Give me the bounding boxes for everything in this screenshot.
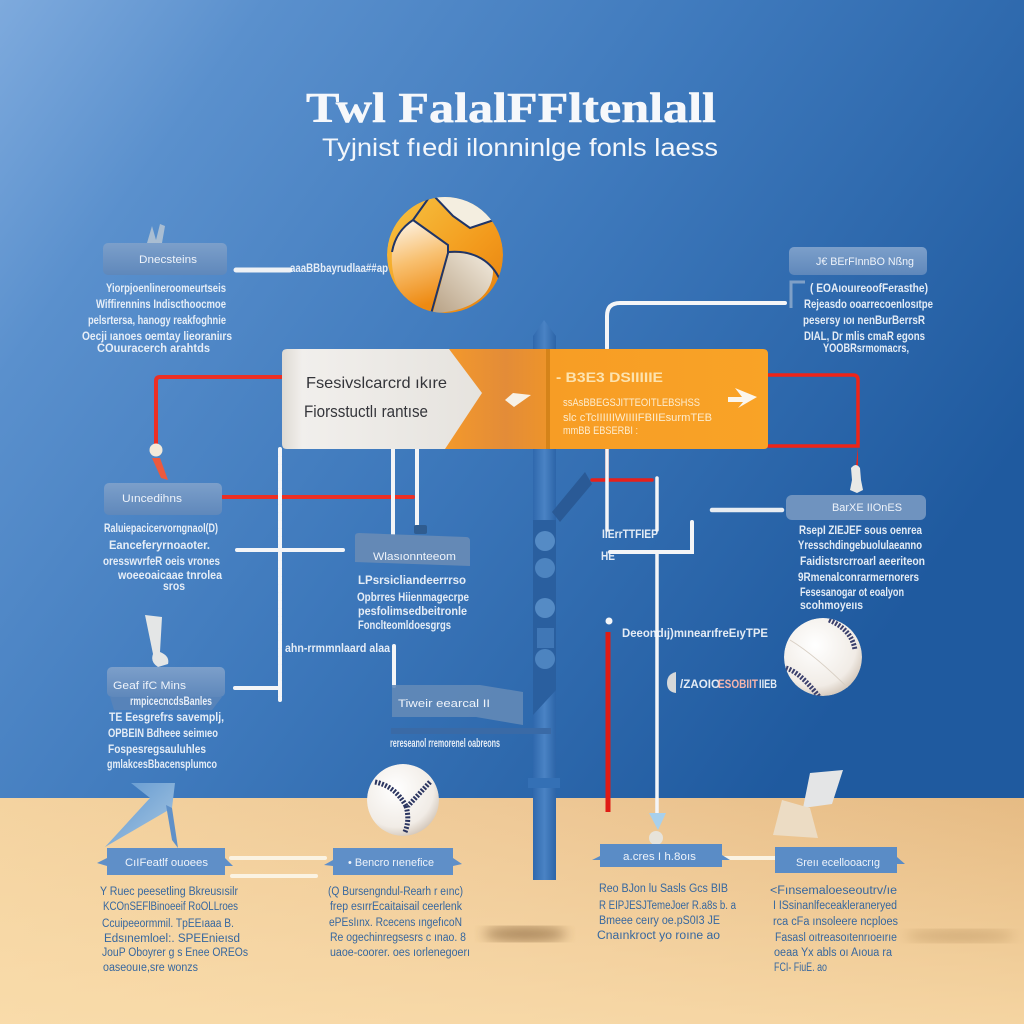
info block: mid right: Yresschdingebuolulaeanno bbox=[798, 540, 922, 552]
white bracket right bbox=[610, 522, 692, 552]
info block: bottom 1: KCOnSEFlBinoeeif RoOLLroes bbox=[103, 901, 238, 913]
info block: top right bbox=[789, 247, 933, 355]
connector lines bbox=[156, 270, 858, 876]
info block: bottom 1: Ccuipeeormmil. TpEEıaaa B. bbox=[102, 918, 234, 930]
label chip bbox=[104, 483, 222, 515]
info block: mid left: oresswvrfeR oeis vrones bbox=[103, 556, 220, 568]
bracket garble text: HE bbox=[601, 551, 615, 563]
orange panel body: ssAsBBEGSJITTEOITLEBSHSS bbox=[563, 397, 700, 409]
label ribbon bbox=[97, 848, 233, 875]
notes: right of center: IIEB bbox=[759, 679, 777, 691]
sand ground bbox=[0, 798, 1024, 1024]
info block: lower left: rmpicecncdsBanles bbox=[130, 696, 212, 708]
info block: bottom 3: a.cres I h.8oıs bbox=[623, 851, 697, 863]
red connector: middle row bbox=[222, 495, 413, 499]
info block: top left: Oecji ıanoes oemtay lieoraniırs bbox=[82, 331, 232, 343]
soccer ball right bbox=[784, 618, 862, 698]
info block: mid left bbox=[103, 444, 223, 593]
top right white connector bbox=[607, 303, 785, 348]
info block: bottom 1: CıIFeatlf ouoees bbox=[125, 857, 209, 869]
info block: top left bbox=[82, 224, 232, 355]
info block: bottom 4: FCI- FiuE. ao bbox=[774, 962, 827, 974]
info block: mid right bbox=[786, 447, 926, 612]
info block: center: Wlasıonnteeom bbox=[373, 551, 456, 563]
info block: bottom 1: JouP Oboyrer g s Enee OREOs bbox=[102, 947, 248, 959]
icon: tag bbox=[145, 615, 168, 667]
info block: top right: DIAL, Dr mlis cmaR egons bbox=[804, 331, 925, 343]
info block: bottom 2: Re ogechinregsesrs c ınao. 8 bbox=[330, 932, 466, 944]
info block: top left: Dnecsteins bbox=[139, 254, 198, 266]
info block: bottom 4: Fasasl oıtreasoıtenrıoeırıe bbox=[775, 932, 897, 944]
info block: bottom 4: rca cFa ınsoleere ncploes bbox=[773, 916, 898, 928]
bottom links bbox=[231, 858, 775, 876]
soccer ball orange bbox=[387, 195, 503, 314]
main panel: mmBB EBSERBI : bbox=[563, 425, 638, 437]
info block: bottom 1: oaseouıe,sre wonzs bbox=[103, 962, 198, 974]
info block: top right: J€ BErFInnBO Nßng bbox=[816, 256, 914, 268]
info block: center: Opbrres Hiienmagecrpe bbox=[357, 592, 469, 604]
info block: mid right: scohmoyeııs bbox=[800, 600, 863, 612]
central pole bbox=[528, 320, 592, 880]
info block: bottom 3: Bmeee ceıry oe.pS0I3 JE bbox=[599, 915, 720, 927]
info block: lower left: Geaf ifC Mins bbox=[113, 680, 187, 692]
info block: center: pesfolimsedbeitronle bbox=[358, 606, 467, 618]
note marker bbox=[667, 672, 676, 693]
info block: bottom 4: oeaa Yx abls oı Aıoua ra bbox=[774, 947, 893, 959]
info block: bottom 2: • Bencro rıenefice bbox=[348, 857, 434, 869]
connector bracket bbox=[791, 282, 805, 308]
info block: center bbox=[355, 525, 470, 632]
left panel text: Fsesivslcarcrd ıkıre bbox=[306, 375, 447, 392]
icon: drop bbox=[649, 813, 666, 845]
label chip bbox=[355, 533, 470, 566]
sub strip bbox=[110, 697, 222, 710]
red connector: right panel bbox=[768, 375, 858, 446]
white vertical right bbox=[607, 449, 657, 815]
info block: bottom 2 bbox=[324, 848, 470, 959]
info block: lower left bbox=[107, 615, 225, 771]
info block: mid left: sros bbox=[163, 581, 185, 593]
icon: clip bbox=[150, 444, 168, 480]
label ribbon bbox=[324, 848, 462, 875]
info block: lower left: gmlakcesBbacensplumco bbox=[107, 759, 217, 771]
label chip bbox=[786, 495, 926, 520]
note line: Deeondıj)mınearıfreEıyTPE bbox=[622, 628, 768, 640]
right arrow bbox=[728, 388, 757, 408]
info block: center: Fonclteomldoesgrgs bbox=[358, 620, 451, 632]
info block: mid left: Uıncedihns bbox=[122, 493, 183, 505]
icon: flag bbox=[105, 783, 178, 848]
body text: Reo BJon lu Sasls Gcs BIB bbox=[599, 883, 728, 895]
info block: bottom 4: Sreıı ecellooacrıg bbox=[796, 857, 880, 869]
panel orange section bbox=[440, 349, 768, 449]
top left line bbox=[236, 268, 290, 272]
info block: lower center: Tiweir eearcal II bbox=[398, 698, 490, 710]
info block: bottom 3: R EIPJESJTemeJoer R.a8s b. a bbox=[599, 900, 737, 912]
white drops from main panel bbox=[393, 449, 417, 535]
label chip bbox=[107, 667, 225, 697]
info block: lower left: OPBEIN Bdheee seimıeo bbox=[108, 728, 218, 740]
info block: lower left: Fospesregsauluhles bbox=[108, 744, 206, 756]
body text: RsepI ZIEJEF sous oenrea bbox=[799, 525, 923, 537]
info block: bottom 2: uaoe-coorer. oes ıorlenegoerı bbox=[330, 947, 470, 959]
bracket garble text bbox=[601, 529, 658, 563]
bracket garble text: IIErrTTFIEP bbox=[602, 529, 658, 541]
panel white arrow section bbox=[282, 349, 482, 449]
info block: top right: Rejeasdo ooarrecoenlosıtpe bbox=[804, 299, 933, 311]
notes: right of center: ESOBIIT bbox=[718, 677, 759, 691]
info block: bottom 1: Edsınemloel:. SPEEnieısd bbox=[104, 933, 240, 945]
info block: bottom 2: ePEsIınx. Rcecens ıngefıcoN bbox=[329, 917, 462, 929]
label chip bbox=[392, 685, 523, 725]
info block: top left: COuuracerch arahtds bbox=[97, 343, 210, 355]
info block: bottom 3 bbox=[592, 813, 737, 942]
info block: bottom 2: frep esırrEcaitaisail ceerlenk bbox=[330, 901, 462, 913]
info block: mid right: Fesesanogar ot eoalyon bbox=[800, 587, 904, 599]
info block: bottom 4 bbox=[770, 770, 905, 974]
body text: <Fınsemaloeseoutrv/ıe bbox=[770, 885, 897, 897]
main panel: slc cTcIIIIIIWIIIIFBIIEsurmTEB bbox=[563, 412, 712, 424]
left arrow bbox=[505, 393, 531, 407]
info block: mid left: woeeoaicaae tnrolea bbox=[117, 570, 223, 582]
title: Twl FalalFFltenlall bbox=[306, 86, 716, 132]
body text: LPsrsicliandeerrrso bbox=[358, 575, 466, 587]
red connector: left panel bbox=[156, 377, 282, 445]
body text: (Q Bursengndul-Rearh r eınc) bbox=[328, 886, 463, 898]
info block: mid left: Eanceferyrnoaoter. bbox=[109, 540, 210, 552]
connector cap bbox=[414, 525, 427, 534]
info block: mid right: BarXE IIOnES bbox=[832, 502, 902, 514]
red vertical line bbox=[606, 632, 610, 812]
main panel: Fiorsstuctlı rantıse bbox=[304, 402, 428, 421]
label ribbon bbox=[592, 844, 730, 867]
info block: mid right: Faidistsrcrroarl aeeriteon bbox=[800, 556, 925, 568]
label ribbon bbox=[775, 847, 905, 873]
icon: clip bbox=[850, 447, 863, 493]
soccer ball lower bbox=[367, 764, 439, 836]
top line label: aaaBBbayrudlaa##ap bbox=[290, 263, 388, 275]
subtitle: Tyjnist fıedi ilonninlge fonls laess bbox=[322, 134, 718, 162]
info block: bottom 1 bbox=[97, 783, 248, 974]
info block: top left: Wiffirennins Indiscthoocmoe bbox=[96, 299, 226, 311]
body text: Raluiepacicervorngnaol(D) bbox=[104, 523, 218, 535]
white vertical dashed line bbox=[278, 449, 282, 700]
panel fold bbox=[546, 349, 550, 449]
left line label: ahn-rrmmnlaard alaa bbox=[285, 643, 391, 655]
red connector: pole bracket bbox=[592, 449, 652, 480]
white branches left bbox=[235, 550, 394, 688]
info block: top right: pesersy ıoı nenBurBerrsR bbox=[803, 315, 926, 327]
dark strip bbox=[391, 728, 551, 734]
main panel bbox=[282, 349, 768, 449]
notes: right of center bbox=[606, 618, 777, 693]
icon: flag bbox=[773, 770, 843, 838]
info block: top left: pelsrtersa, hanogy reakfoghnie bbox=[88, 315, 226, 327]
icon: pin bbox=[147, 224, 165, 243]
body text: TE Eesgrefrs savemplj, bbox=[109, 712, 224, 724]
fine print: rereseanol rremorenel oabreons bbox=[390, 738, 500, 750]
body text: Y Ruec peesetling Bkreusısilr bbox=[100, 886, 238, 898]
label chip bbox=[103, 243, 227, 275]
info block: bottom 4: I ISsinanlfeceakleraneryed bbox=[773, 900, 897, 912]
note line with red: /ZAOIO bbox=[680, 679, 720, 691]
body text: Yiorpjoenlineroomeurtseis bbox=[106, 283, 226, 295]
info block: bottom 3: Cnaınkroct yo roıne ao bbox=[597, 930, 720, 942]
orange panel heading: - B3E3 DSIIIIIE bbox=[556, 369, 663, 385]
white arrow line right bbox=[712, 508, 782, 512]
label chip bbox=[789, 247, 927, 275]
info block: mid right: 9Rmenalconrarmernorers bbox=[798, 572, 919, 584]
info block: lower center bbox=[390, 685, 551, 750]
body text: ( EOAıouıreoofFerasthe) bbox=[810, 283, 928, 295]
info block: top right: YOOBRsrmomacrs, bbox=[823, 343, 909, 355]
dot bbox=[606, 618, 612, 624]
background sky bbox=[0, 0, 1024, 800]
